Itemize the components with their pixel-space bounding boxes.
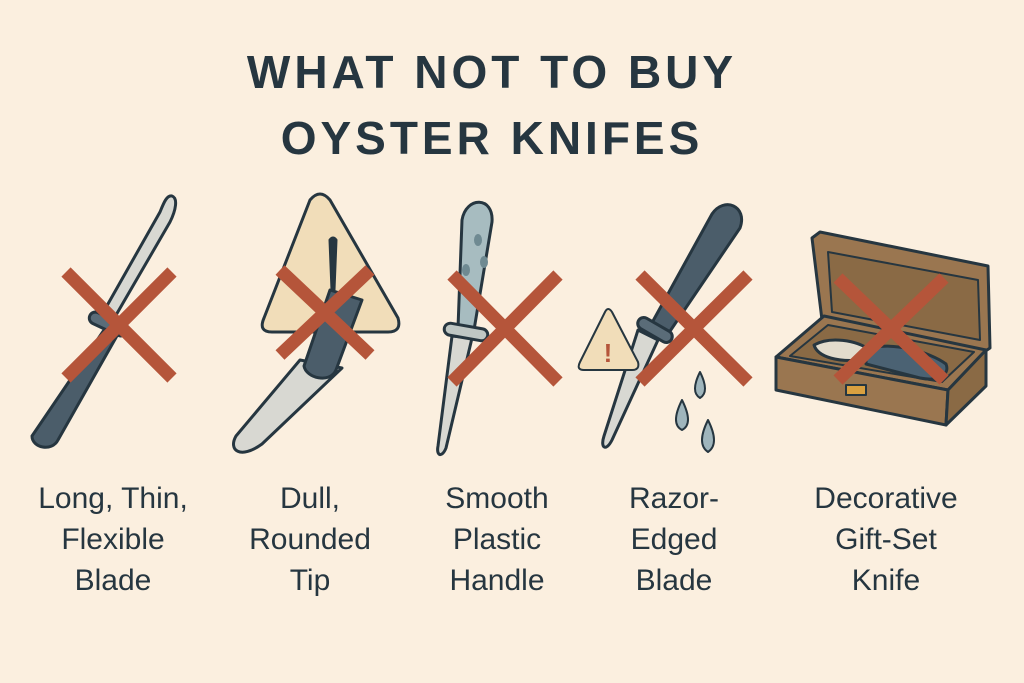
label 5: Gift-Set — [835, 523, 938, 556]
icon: warning triangle — [579, 309, 638, 370]
label 3: Smooth — [445, 482, 549, 515]
item 1: long thin flexible blade — [32, 196, 176, 447]
label 4: Razor- — [629, 482, 719, 515]
item 5: decorative gift-set box — [776, 232, 990, 425]
label 5: Knife — [852, 564, 920, 597]
label 3: Handle — [449, 564, 545, 597]
label 4: Edged — [631, 523, 717, 556]
label 2: Dull, — [280, 482, 340, 515]
item 4: razor-edged blade — [579, 205, 748, 452]
item 4: razor-edged blade: ! — [604, 338, 612, 368]
label 4: Blade — [636, 564, 712, 597]
icon: drops — [676, 372, 714, 452]
label 3: Plastic — [453, 523, 541, 556]
label 1: Long, Thin, — [38, 482, 188, 515]
item 3: smooth plastic handle — [438, 202, 558, 455]
item 2: dull rounded tip — [234, 194, 399, 452]
label 2: Rounded — [249, 523, 371, 556]
labels — [38, 482, 958, 597]
title: WHAT NOT TO BUY — [247, 46, 737, 98]
label 1: Blade — [75, 564, 151, 597]
title: OYSTER KNIFES — [281, 112, 703, 164]
label 2: Tip — [290, 564, 330, 597]
title — [247, 46, 737, 164]
label 1: Flexible — [61, 523, 165, 556]
label 5: Decorative — [814, 482, 958, 515]
